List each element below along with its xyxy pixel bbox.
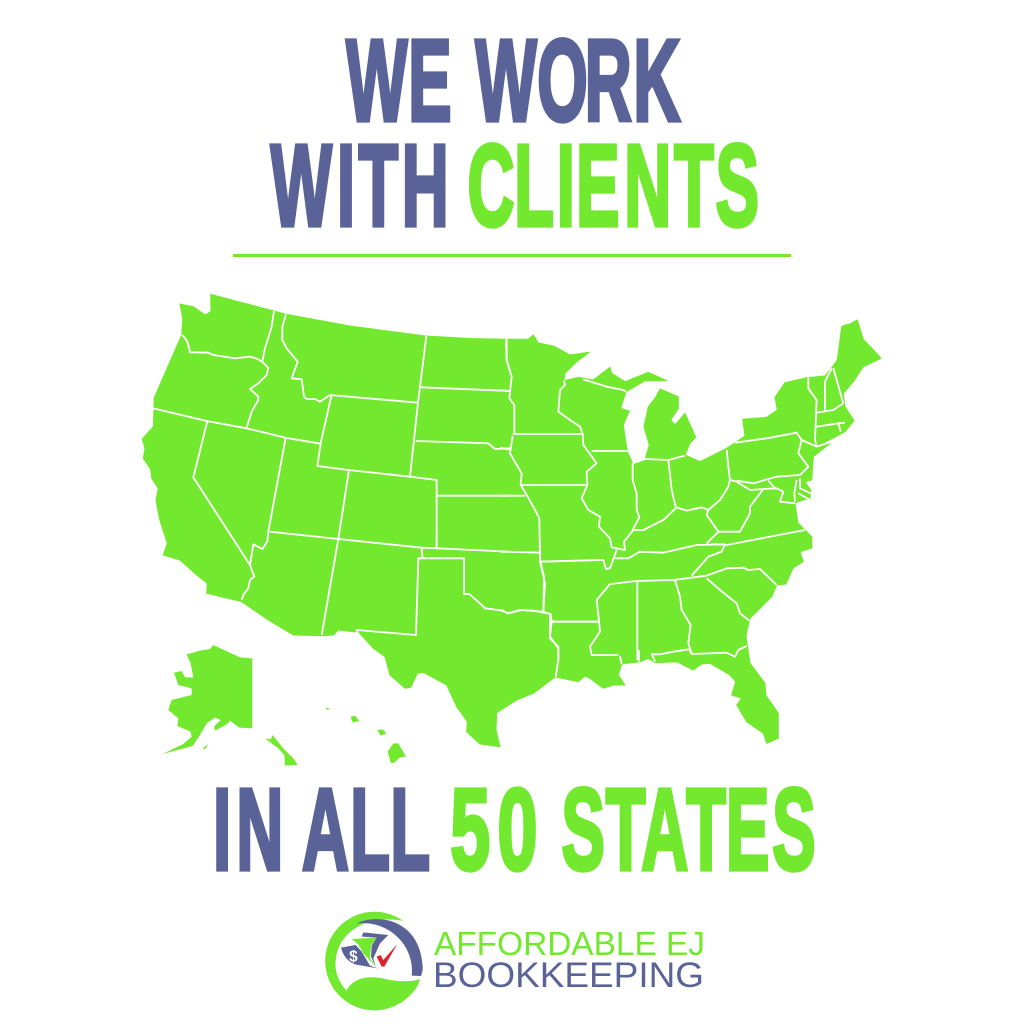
- headline: in all 50 states: [213, 765, 816, 895]
- Hawaii: [325, 708, 406, 763]
- headline: in all 50 states: IN ALL: [213, 765, 430, 894]
- title: we work with clients: [271, 16, 759, 250]
- wordmark: BOOKKEEPING: [433, 956, 704, 995]
- map of the United States: [142, 294, 881, 766]
- state borders: gulf states: [620, 646, 747, 664]
- wordmark: [433, 925, 705, 995]
- headline: in all 50 states: 50: [450, 766, 537, 895]
- state borders: midwest and east: [500, 339, 845, 660]
- wordmark: AFFORDABLE EJ: [434, 925, 705, 962]
- icon: circular emblem with bills and checkmark: $: [349, 948, 358, 965]
- headline: in all 50 states: STATES: [562, 765, 816, 894]
- Alaska: [163, 645, 298, 766]
- title: we work with clients: WE WORK: [346, 16, 680, 145]
- icon: circular emblem with bills and checkmark: [325, 912, 423, 1010]
- state borders: south central: [357, 540, 600, 677]
- logo: affordable ej bookkeeping: [325, 912, 705, 1010]
- title: we work with clients: CLIENTS: [467, 121, 759, 250]
- title: we work with clients: WITH: [271, 121, 449, 250]
- mainland states: [142, 294, 881, 747]
- state borders: west: [153, 311, 510, 635]
